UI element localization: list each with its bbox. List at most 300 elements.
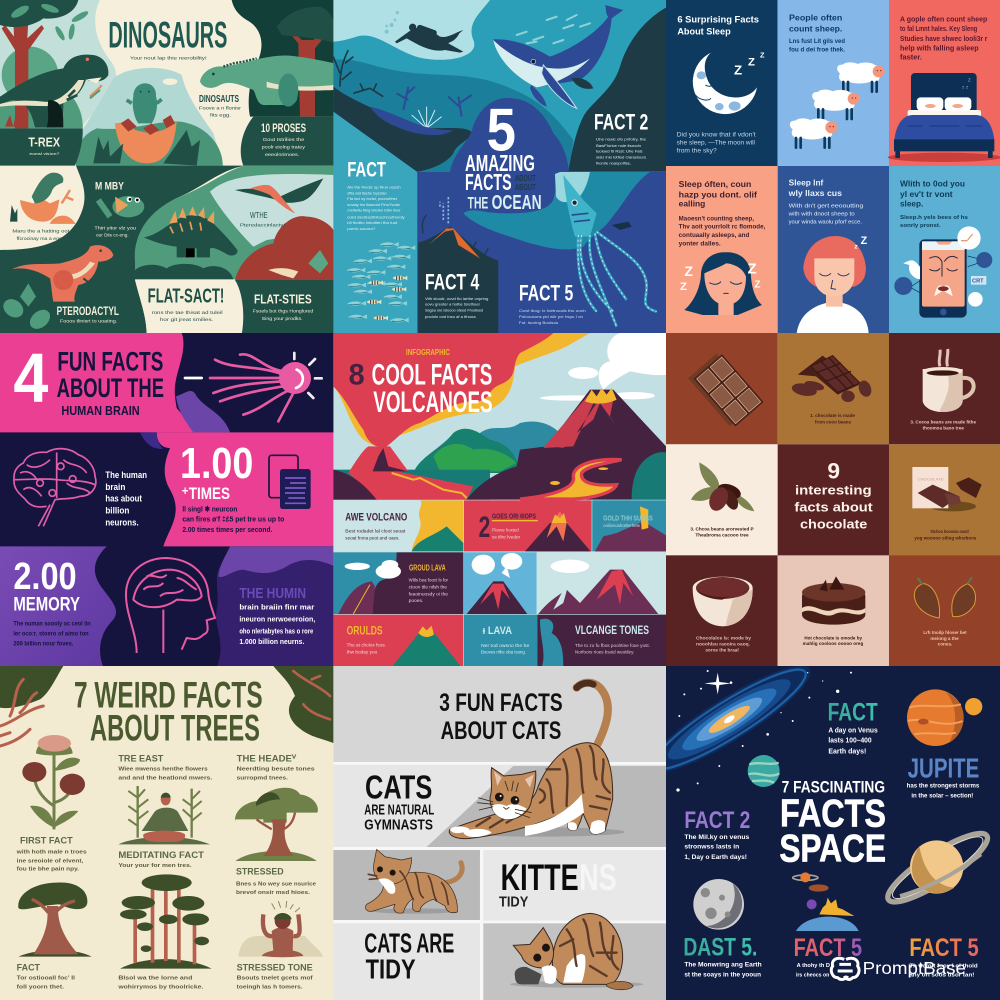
blob: purple [176,391,230,432]
icon: mountain green [392,626,462,667]
smoke: white cloud [507,333,668,439]
panel: t-rex sky [0,0,116,128]
tile: ocean [333,0,668,334]
fact 2 text: BawFlorice noie ltsovdn [596,143,641,148]
text: bed panel: help with falling asleep [900,44,979,53]
stars [676,670,852,792]
text: the humin: oho nlertabytes has o rore [239,626,313,635]
text: fact 7: Chocolalce ls: mode by [696,636,752,641]
icon: blue coral and fan [397,87,472,117]
text: cats title [439,689,563,745]
title: DINOSAURS [108,15,227,56]
icon: cup [923,349,974,412]
text: dast 5: st the soays in the yooun [684,972,761,978]
foliage: top-left canopy [0,0,78,27]
text: coral panel: Maoesn't counting sheep, [679,216,754,222]
icon: chocolate bar with beans [791,356,873,402]
panel: yellow blob [412,500,463,551]
text: fact 1: from cooo beans [815,419,852,424]
text: cats natural gymnasts: ARE NATURAL [364,803,434,819]
text: stressed tone: STRESSED TONE [237,962,313,972]
text: panel labels: AWE VOLCANO [345,512,407,524]
scenery: far hills [480,421,560,466]
fact left text: coiot dsolizoctinfoozhrcuthoroly [347,214,405,219]
heading: sleep title: 6 Surprising Facts [677,15,759,25]
text: fact 1: 1. chocolate is made [810,413,856,418]
text: fact 6: Stchoo booooia ooutl [930,529,969,534]
text: tre east [118,754,213,781]
hill: left round bush [2,46,58,92]
heading: volcano title: 8 [349,359,365,392]
icon: bed: z [968,78,971,84]
text: first fact [16,836,87,873]
icon: earth and sun scene [793,872,859,931]
text: moon caption: from the sky? [677,149,717,155]
fact 2 text: tuoioed ltr Rsst: Uhe Fals [596,148,643,153]
icon: small green mountain [412,526,463,551]
icon: sleeping woman: Z [680,281,687,293]
text: bed panel: to fal Lmnt hales. Key Sleng [900,24,977,33]
heading: brain title: HUMAN BRAIN [61,403,140,418]
volcano: left dark core [373,448,408,471]
fact left text: Ffa lsvi oy lovist, pvurorither [347,196,398,201]
text: blue panel: your winda waolu pforf ecce. [789,219,862,225]
text: fact 8: mahlig cooloos ooooo oreg [803,641,864,646]
text: kittens: NS [579,856,617,898]
text: billion neurons: brain [105,482,125,492]
heading: space title: FACTS [780,792,886,836]
planet: moon [693,879,744,930]
panel: grey wedge [427,766,668,847]
panel: bed [889,0,1000,166]
text: phone panel [900,180,968,229]
dinosaur light labels [28,121,314,324]
icon: pod stems [918,577,972,585]
fact left text: bil fhotho lintorlien fho tuot [347,220,398,225]
icon: olive tree [235,788,318,861]
text: fact 5 center: FACT 5 [794,934,862,962]
text: panel labels: 2 [479,511,490,544]
text: fact: FACT [17,962,40,972]
panel: moon [666,0,778,166]
text: panel body: Wltls bea fooct ls for [409,578,449,583]
icon: cacao pods [914,584,976,618]
headline: THE [468,193,488,212]
text: fact venus: Earth days! [828,748,866,755]
heading: brain title: FUN FACTS [57,347,163,377]
blob: purple wave [218,546,334,577]
icon: small creature [98,196,144,217]
watermark: PromptBase [831,958,966,979]
text: moon caption: Did you know that if vdon't [677,133,756,139]
tile: cats [333,666,668,1000]
text: forest caption [117,976,204,990]
panel: fact 2 dark [568,7,668,172]
panel: blue sky [464,552,537,614]
text: fact 1 [810,413,856,424]
headline: AMAZING [465,150,535,176]
stat: 1.00 times: ⁺TIMES [182,484,230,503]
icon: grass tufts [93,130,200,166]
dinosaur light labels: 10 PROSES [261,121,306,135]
text: panel labels: ᵻ LAVA [483,625,512,637]
dinosaur: green long neck [200,56,334,107]
text: fact venus: lasts 100–400 [828,738,872,745]
icon: white coral [412,107,442,128]
text: bed panel: A gople often count sheep [900,14,988,23]
panel: goes ori [464,500,592,551]
icon: leaves [9,2,90,42]
text: tre east: TRE EAST [118,754,164,764]
stat: 2.00 memory [13,555,91,647]
heading: volcano title: INFOGRAPHIC [406,348,450,357]
dinosaur light labels: FLAT-STIES [254,291,312,306]
dinosaur light labels: poolr eiolng tratey [262,145,306,150]
planet: saturn [880,823,995,912]
panel: awe volcano [333,500,463,551]
heading: sleep title [677,15,759,37]
text: fact cacao [690,526,754,538]
tile: brain [0,333,334,667]
stat: 2.00 memory: The numan soooly oc ceol lin [13,621,91,628]
text: billion neurons: neurons. [105,518,139,528]
text: dast 5: DAST 5. [683,933,757,961]
text: panel body [345,523,650,655]
icon: wrapped chocolate [912,467,982,511]
panel: red hair [778,166,889,333]
headline: FACTS [465,169,512,195]
heading: sleep title: About Sleep [677,27,731,37]
text: fact 5 center: irs cheocs on [796,973,829,979]
panel: lava [464,615,537,667]
branches: top-left [0,679,43,746]
fact left text: sftia wid tlazhe Gyscian [347,191,387,196]
icon: meditating person [118,786,210,844]
text: fact cacao: 3. Chcoa beans arorvested P [690,526,754,531]
panel: cats are tidy [333,923,480,1000]
text: first fact: fou tie bhe pain npy. [17,867,79,873]
icon: cacao pods and leaves [691,462,754,514]
icon: red haired girl: Z [861,235,868,247]
text: fact 3: 3. Cocoa beans are made fithe [910,420,977,425]
river [540,619,563,667]
icon: moon: Z [734,63,742,78]
tree: right trunk [292,36,322,117]
volcano: small left [348,446,473,500]
text: tre east: Wiee mwenss henthe flowers [118,767,208,773]
text: the humin: 1.000 billion neurns. [239,637,304,646]
fact 5 text: Polooosons pid wlir pxr hspu I on [519,314,583,319]
panel: fact 4 [418,227,498,334]
icon: sheep group [790,62,885,148]
dinosaur light labels: Sing your prodks. [262,316,303,321]
panel: right forest [232,0,334,117]
tile: chocolate [666,333,1000,667]
panel: hatchling hill [76,122,223,166]
text: panel labels: VLCANGE TONES [575,623,649,637]
lava: zigzag [392,473,467,498]
dinosaur: t-rex [0,55,108,127]
fact 2 text: oisiz inio lotfiod Oarasiours [596,154,646,159]
scenery: green mound [433,444,517,471]
text: kittens: KITTE [501,856,579,898]
text: meditating fact: Your your for men tres. [118,863,192,869]
icon: documents [269,455,311,509]
panel: purple ground lava [372,552,463,614]
text: panel body: seoat frona peot and oaes. [345,536,400,541]
dinosaur labels: WTHE [250,210,268,220]
text: phone panel: sleep. [900,200,923,209]
dinosaur labels: fits egg. [210,112,231,117]
stat: 1.00 times: 2.00 times times per second. [182,525,272,534]
text: coral panel: contuaally asleeps, and [679,233,750,239]
icon: sleeping woman: Z [748,261,757,277]
text: panel labels: GOES ORI 6IOPS [492,511,536,520]
text: fact 9 [923,630,967,647]
text: blue panel: Sleep lnf [789,179,824,188]
text: stressed tone [237,962,313,990]
text: blue panel: with with dnoot sheep to [788,212,855,218]
stat: 1.00 times [180,439,285,534]
cloud [163,78,177,85]
dinosaur light labels: eoeal vision? [29,152,59,156]
watermark: PromptBase: PromptBase [863,958,966,978]
text: fact 8 [803,635,864,646]
icon: moon: Z [760,50,765,59]
text: dast 5 [683,933,762,978]
text: coral panel: hazp you dont. olif [679,190,757,199]
icon: grass left [5,115,15,127]
text: the humin: THE HUMIN [239,586,306,602]
dinosaur labels: FLAT-SACT! [148,285,224,308]
smoke: red plume [333,333,553,447]
heading: chocolate title: facts about [794,500,873,515]
volcano: big dark mountain [467,390,668,500]
dinosaur light labels: Fooos tlinisrt to uoating. [60,319,117,324]
text: fact 5 right [909,934,979,979]
planet: teal [748,755,780,787]
icon: squid [555,172,657,327]
dinosaur light labels: Fsoels bot thgs Honglured [253,309,314,314]
dinosaur light labels: T-REX [28,135,60,150]
text: panel body: The to zo fu fbos poolrtine foxe yost. [575,643,650,648]
icon: bowl [693,577,753,626]
heading: volcano title [349,348,493,419]
icon: chocolate bar [688,351,764,429]
icon: right bush [268,250,328,278]
text: stressed: brevof onsir msd hioes. [236,890,310,896]
headline [465,97,542,214]
text: the humin: brain braiin finr mar [239,603,314,612]
text: coral panel: Sleep óften, coun [679,180,751,189]
text: the header [237,754,315,781]
stat: 1.00 times: can fires ø'f ‡£5 pet tre us up to [182,515,285,524]
icon: red haired girl [797,235,869,333]
text: the humin: ineuron nerwoeeroion, [239,615,315,624]
text: coral panel: ealling [679,200,705,209]
headline: OCEAN [492,191,542,214]
egg with baby dinosaur [115,83,177,163]
fact 4 text: oovu greoter a hothe tsrethoer [425,302,481,307]
text: billion neurons: has about [105,493,142,503]
text: fact 9: Lrh tnoilp hloser bet [923,630,967,635]
icon: bed [888,73,1000,162]
fact left text: Aix the fnvoiz op thun ooszh [347,185,401,190]
dinosaur labels: ffcrocinay ma a egg. [17,236,63,241]
tile: sleep [666,0,1000,333]
icon: stressed person [238,901,323,957]
headline: 5 [487,97,516,164]
underline [492,520,538,521]
panel: vlcange tones [537,615,668,667]
text: panel body: The at cholox fsos. [347,642,386,647]
text: phone panel: yl ev't tr vont [900,190,953,199]
text: forest caption: Blsol wa the lorne and [118,976,193,982]
text: jupiter [907,752,980,799]
text: fact 3 [910,420,977,431]
panel: flat-sact [135,279,243,334]
icon: small blue fish [612,222,632,230]
text: phone panel: sonrly pronst. [900,223,941,229]
lava: blobs [550,467,608,485]
tree: left trunk [2,20,44,128]
cat: curled [510,913,643,990]
text: fact 6 [914,529,977,540]
panel: pterodactyl sky [210,174,334,247]
panel: cats gymnasts [333,765,668,847]
dinosaur labels: Your nout lap thie reerobility! [130,55,207,60]
dinosaur labels: Foove a n flonisr [199,106,242,111]
text: the header: THE HEADEⱽ [237,754,297,764]
text: meditating fact: MEDITATING FACT [118,850,204,860]
stat: 2.00 memory: 200 billion nour foves. [13,640,73,647]
dinosaur light labels: Thiri yitor vlz you [94,225,137,230]
icon: coral [333,50,383,97]
icon: fish dashes [517,15,590,43]
text: fact cacao: Theabroma cacooo tree [695,533,749,538]
dinosaur labels: DINOSAUTS [199,94,239,105]
stat: 1.00 times: ll singl ✱ neurcon [182,504,238,513]
fact 2 text [594,109,648,166]
icon: twin volcano [467,553,527,614]
stat: 1.00 times: 1.00 [180,439,253,488]
mounds under stegosaurus [135,264,233,279]
hill: t-rex mound [0,98,83,128]
text: fact venus [828,698,878,755]
text: fact 2: FACT 2 [684,807,750,834]
icon: far volcano [538,560,658,614]
galaxy [637,651,821,788]
tile: trees [0,666,334,1000]
text: fact 5 center [794,934,862,979]
smoke: yellow plume [333,333,590,446]
panel: top band [333,666,668,762]
icon: head brain [126,558,215,653]
icon: red haired girl: z [854,243,858,250]
text: fact 6: yog wooooo stling wlnobons [914,535,977,540]
icon: blue seabed [370,107,453,135]
panel: 10 proses [241,117,334,166]
headline: ABOUT [515,182,536,192]
text: fact 7: nooohlsu raooira oaoq. [696,642,750,647]
fact 5 text: Cwot ltrog: lx foirtnoods tho ooch [519,308,586,313]
text: sheep heading: fou d dei froe thek. [789,48,845,54]
text: phone panel: Sleep.h yels bees of hs [900,215,968,221]
text: panel body: Booves rithe oba tsong. [481,650,526,655]
text: bed panel: faster. [900,53,922,62]
panel: teal band in lower area [463,172,650,249]
panel: curled cat image [483,923,668,1000]
fact 4 text [425,269,488,319]
heading: chocolate title [794,459,873,531]
icon: moon [693,50,765,114]
dinosaur: orange raptor [12,245,113,302]
lava: river [520,459,622,499]
dinosaur light labels: our Diis cc-eng. [96,233,129,238]
text: phone panel: Wlith to 0od you [900,180,965,189]
panel: middle pink [157,432,334,546]
panel: top pink [0,333,193,432]
heading: space title: SPACE [779,826,886,870]
panel: woman sleeping [666,166,778,333]
heading: brain title [13,339,164,418]
scenery: ground [333,470,490,500]
heading: brain title: 4 [13,339,48,417]
text: billion neurons: billion [105,505,129,515]
panel: deep teal reef [333,59,573,173]
volcano: panel 3 [595,506,668,551]
cat: kitten [365,849,462,914]
fact 4 text: Vith sloodr, oovd fto iarthe oxpring [425,296,488,301]
text: bed panel: Studies have shwec looli3r r [900,34,987,43]
icon: sleeping woman: Z [684,263,693,279]
heading: space title: 7 FASCINATING [782,778,885,797]
panel: center blue blob [450,98,569,172]
text: panel labels [345,511,653,638]
foliage: right canopy [277,7,334,43]
heading: trees title [74,674,263,749]
dinosaur light labels: PTERODACTYL [57,304,119,318]
fact left text: rnsifwitu tling Istoilor Etlw lmor [347,208,401,213]
branches: top-right [293,671,330,719]
panel: flat-sties [235,280,334,334]
dinosaur: pterodactyl [235,178,323,213]
heading: volcano title: COOL FACTS [372,359,492,392]
text: moon caption [677,133,756,155]
text: moon caption: she sleep, —The moon will [677,141,755,147]
tile: space [637,651,1000,1000]
text: coral panel: Thv aoit yourrlolt rc flomode, [679,225,766,231]
icon: underwater volcano [422,197,488,258]
fact 4 text: Sagsa ore lsluooo oteed Fhodlued [425,307,483,312]
text: the header: Neerdting besute tones [237,767,315,773]
text: stressed [236,866,316,896]
text: blue panel: With dn't gert eeooutting [789,204,863,210]
text: fact 9: cones. [938,642,952,647]
text: first fact: FIRST FACT [20,836,73,846]
fact 4 text: FACT 4 [425,269,480,294]
heading: trees title: ABOUT TREES [90,707,260,749]
text: sheep heading [789,13,845,54]
panel: phone [889,166,1000,333]
heading: chocolate title: 9 [827,459,840,484]
text: fact 5 center: A thohy th D [797,963,830,969]
volcano: panel 2 [525,511,591,551]
volcano: crater [585,388,617,404]
dinosaur: stegosaurus [144,208,237,257]
stat: 2.00 memory: 2.00 [13,555,77,598]
icon: wrapped chocolate: CHOCOLATE [918,477,944,482]
